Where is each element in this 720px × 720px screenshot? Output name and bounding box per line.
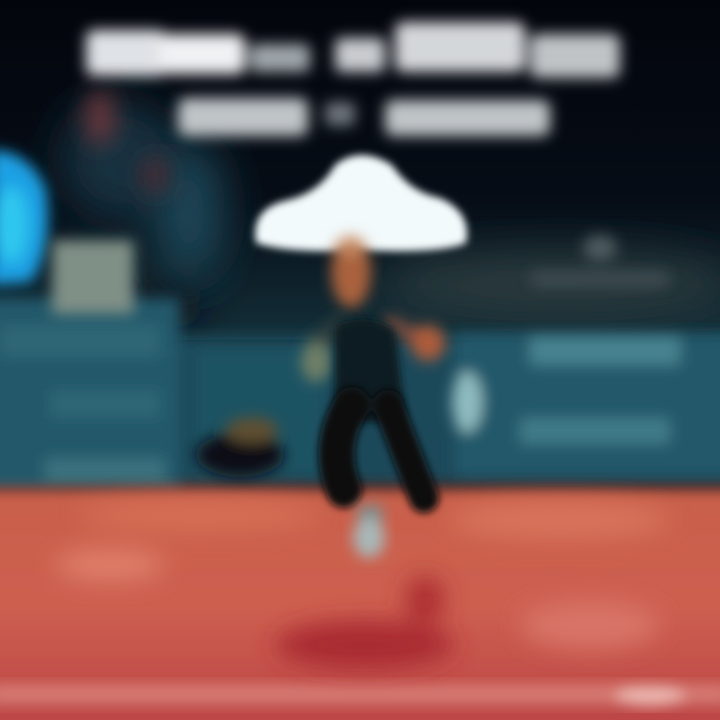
panel: middle teal panel xyxy=(195,350,325,475)
panel: right teal panel xyxy=(452,335,720,475)
floor highlights xyxy=(55,499,670,649)
small emblem right xyxy=(530,235,670,286)
panel: red floor xyxy=(0,488,720,720)
title: blurred headline xyxy=(86,22,620,136)
panel: left teal stacked panel xyxy=(0,298,180,488)
icon: blue glowing shape xyxy=(0,150,48,285)
figure torso xyxy=(335,320,405,422)
background: hazy haze above panels xyxy=(60,100,720,330)
bottom light strip xyxy=(0,684,720,706)
background: dark night sky xyxy=(0,0,720,340)
figure head xyxy=(331,236,371,308)
figure: jumping person xyxy=(301,236,445,558)
icon: white cloud xyxy=(255,155,467,251)
icon: beige square xyxy=(52,240,134,314)
figure shoe xyxy=(353,505,385,558)
figure legs xyxy=(337,405,424,498)
floor red blot xyxy=(275,576,455,669)
icon: reddish smudge beneath title xyxy=(85,90,169,195)
figure arms xyxy=(301,322,445,382)
dark object with tan highlight xyxy=(196,417,284,477)
panel: teal wall band xyxy=(0,335,720,485)
